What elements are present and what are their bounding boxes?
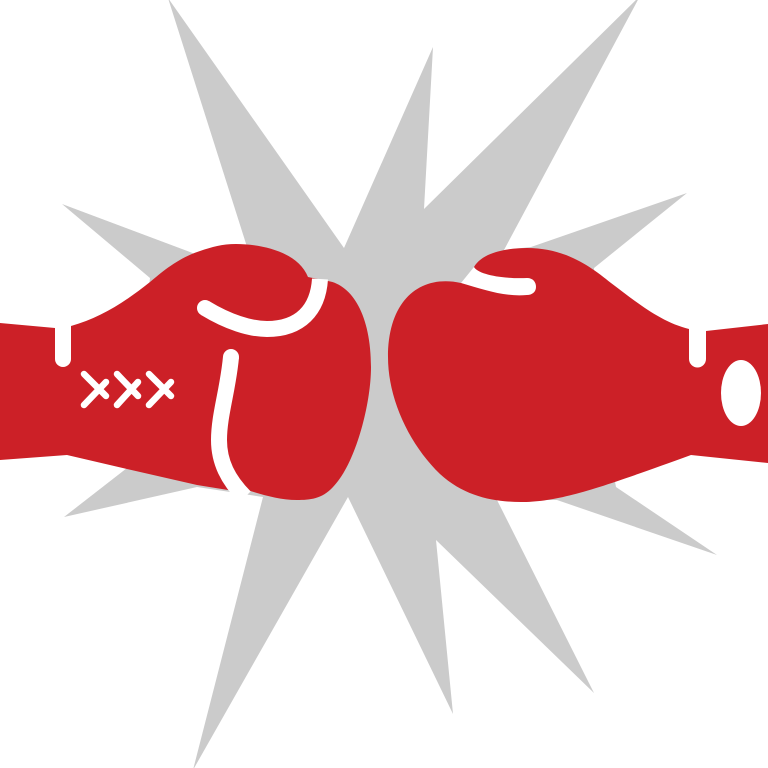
left glove — [0, 244, 371, 500]
left wrist notch — [55, 320, 71, 367]
right glove body — [388, 248, 768, 502]
right wrist notch — [689, 322, 706, 368]
left glove body — [0, 244, 371, 500]
stitching marks — [84, 374, 171, 405]
right glove — [388, 248, 768, 502]
left glove thumb seam — [197, 279, 320, 329]
right wrist oval label — [721, 360, 761, 426]
right glove thumb gap — [461, 267, 540, 297]
left glove palm seam — [219, 349, 245, 497]
